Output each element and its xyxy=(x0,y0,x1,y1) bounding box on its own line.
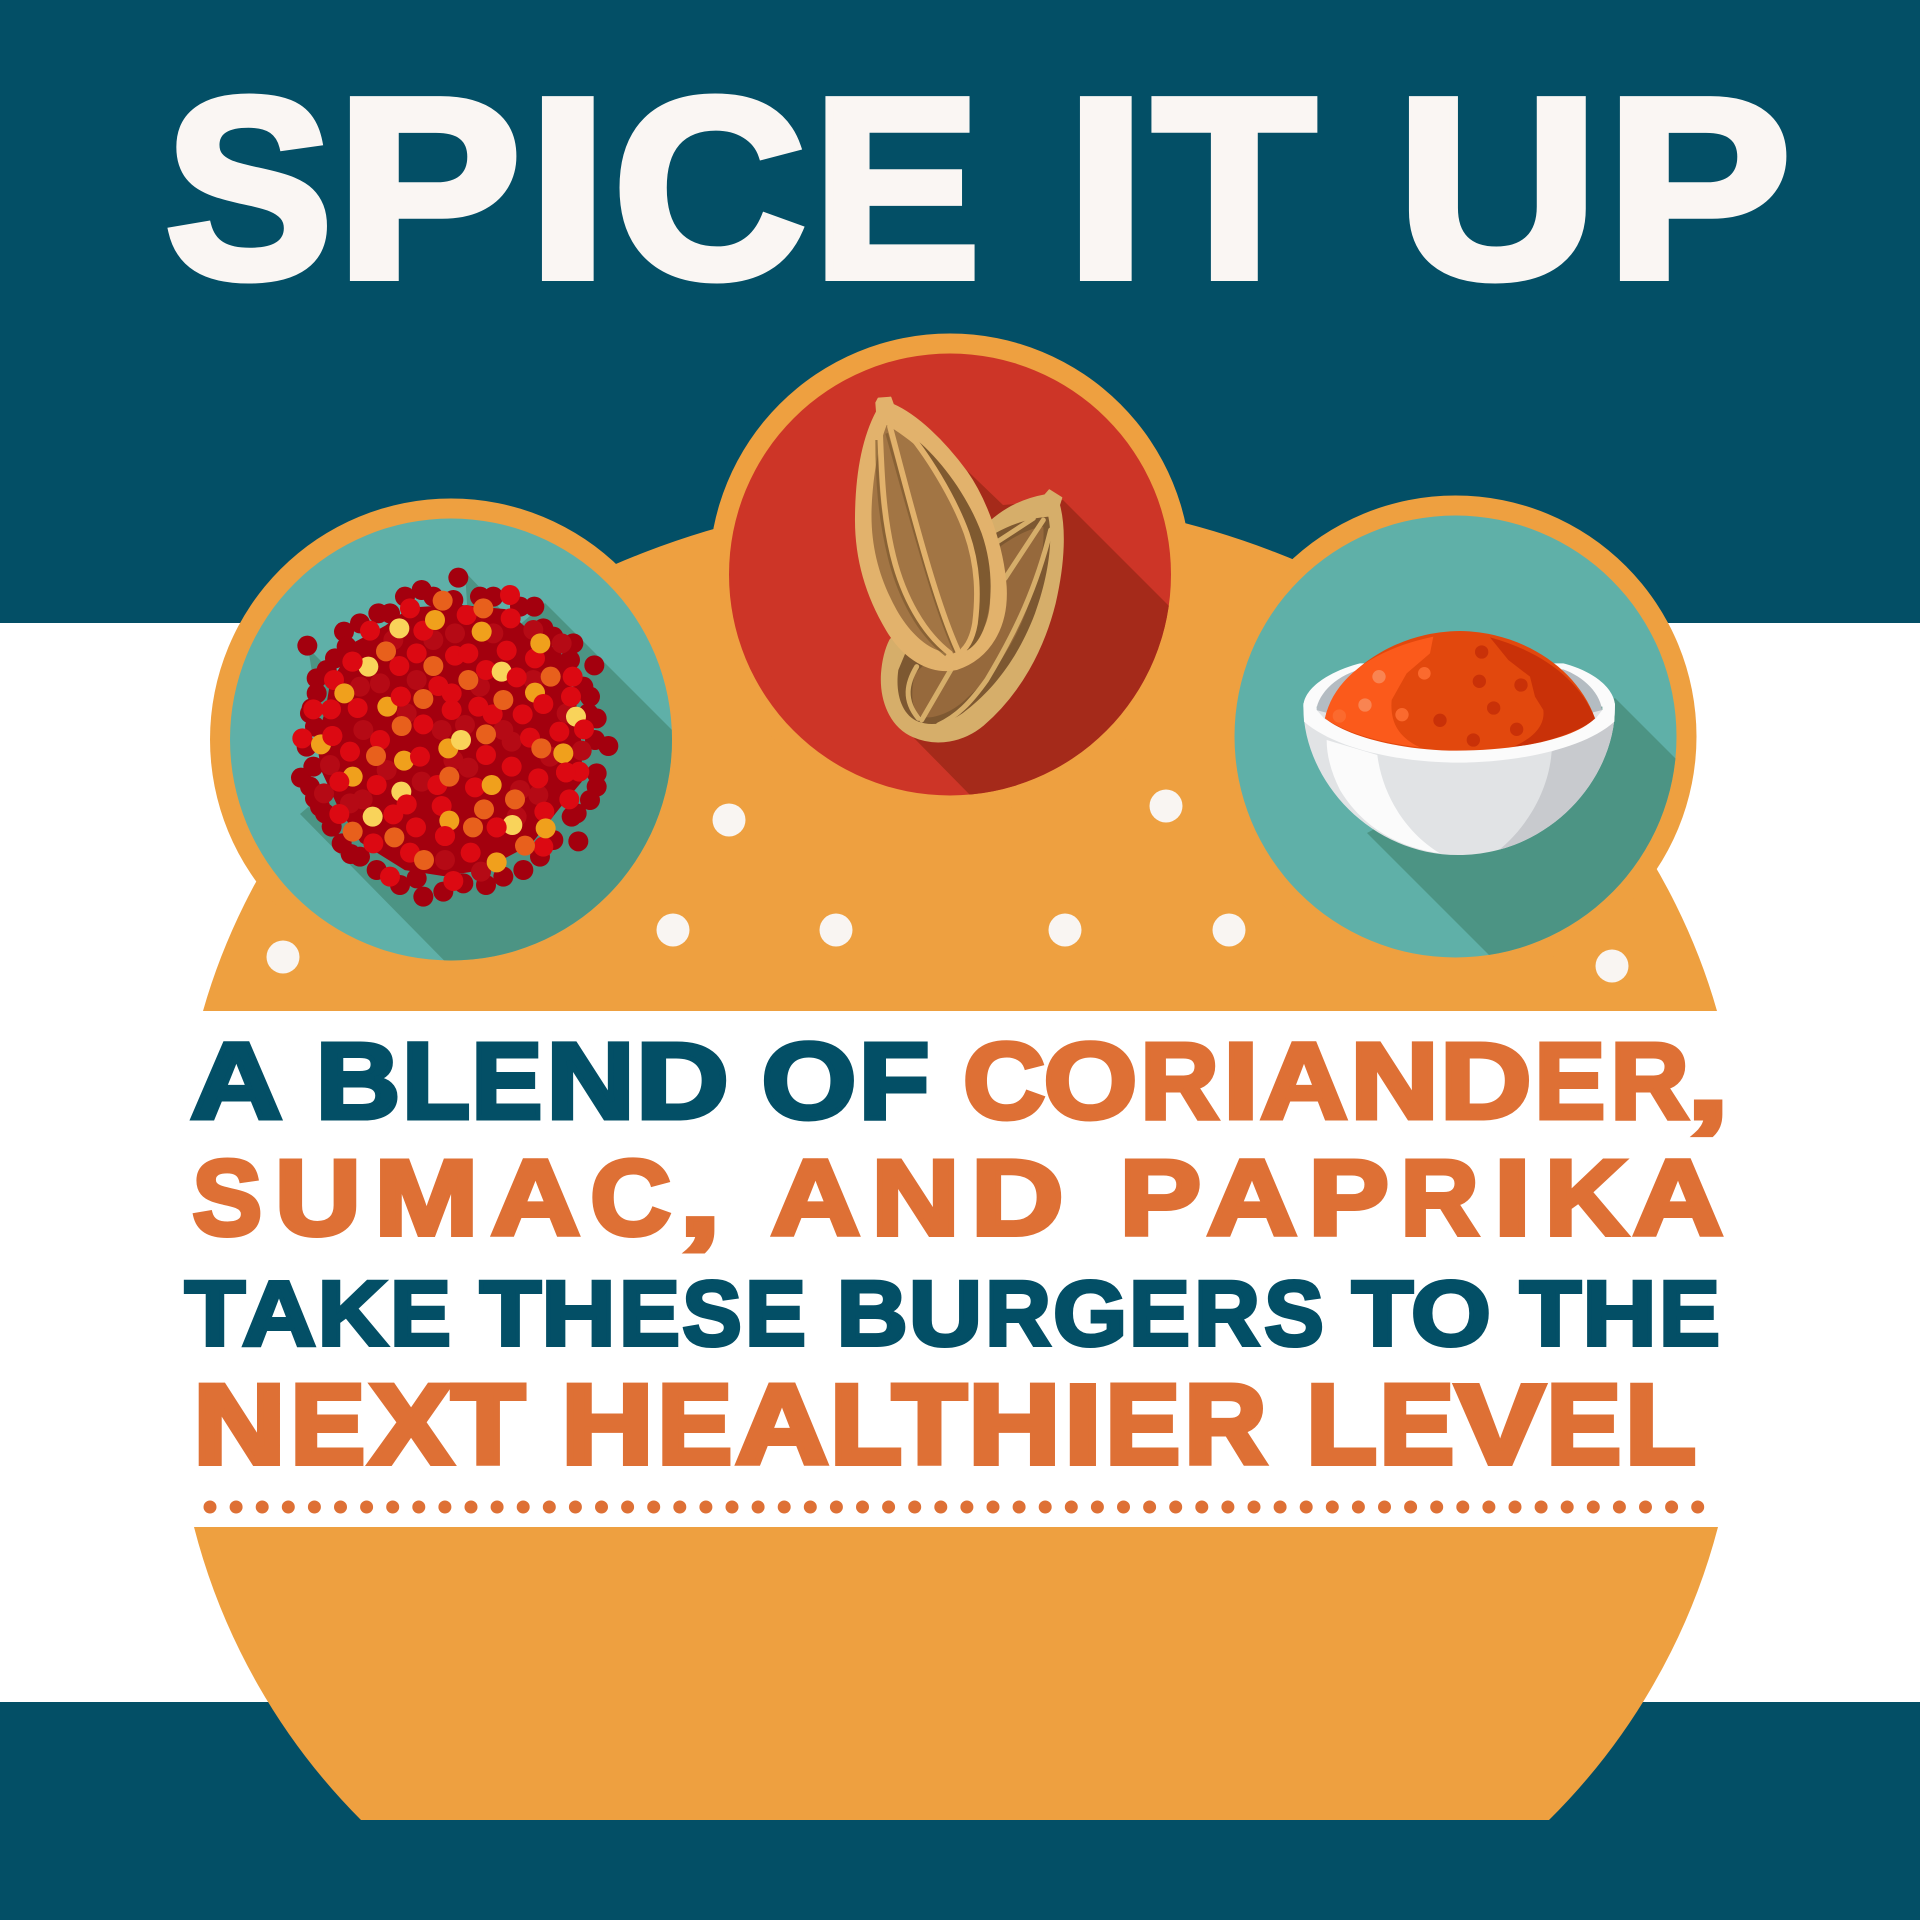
heading line 4: V xyxy=(1456,1362,1544,1487)
bowl right shade xyxy=(1499,722,1614,850)
orange mound xyxy=(203,494,1717,1011)
title: P xyxy=(1606,45,1792,332)
heading line 4: H xyxy=(969,1362,1060,1487)
heading line 1: A xyxy=(1260,1021,1348,1141)
heading line 2: U xyxy=(275,1138,361,1258)
heading line 4: L xyxy=(1307,1362,1377,1487)
long shadow: sumac xyxy=(300,575,672,960)
heading line 3: E xyxy=(1129,1263,1190,1365)
icon: paprika bowl xyxy=(1303,631,1617,857)
heading line 4: T xyxy=(892,1362,966,1487)
heading line 4: E xyxy=(291,1362,365,1487)
icon: coriander seeds xyxy=(856,397,1063,742)
heading line 2: P xyxy=(1120,1138,1201,1258)
heading line 1: O xyxy=(1044,1021,1137,1141)
back seed xyxy=(881,490,1063,742)
heading line 3: E xyxy=(745,1263,806,1365)
heading line 2: N xyxy=(872,1138,959,1258)
heading line 3: R xyxy=(1194,1263,1260,1365)
heading line 4: A xyxy=(736,1362,828,1487)
heading line 3: E xyxy=(619,1263,680,1365)
heading line 1 xyxy=(190,1021,1729,1141)
decorative white dots xyxy=(266,790,1628,982)
heading line 3: G xyxy=(1053,1263,1127,1365)
bowl inner back xyxy=(1316,669,1602,713)
heading line 1: A xyxy=(190,1021,279,1141)
heading line 3: R xyxy=(985,1263,1051,1365)
bowl back rim xyxy=(1303,663,1615,707)
panel: paprika circle xyxy=(1234,496,1696,958)
heading line 4: T xyxy=(452,1362,525,1487)
heading line 3: E xyxy=(1659,1263,1720,1365)
paprika mound xyxy=(1325,631,1595,751)
long shadow: paprika xyxy=(1367,698,1676,955)
heading line 2: A xyxy=(1633,1138,1723,1258)
heading line 4: E xyxy=(658,1362,732,1487)
heading line 4: X xyxy=(370,1362,452,1487)
mound specks xyxy=(1433,645,1528,747)
bowl body xyxy=(1303,707,1615,855)
orange bowl base xyxy=(194,1527,1718,1820)
heading line 4: I xyxy=(1064,1362,1101,1487)
heading line 2: A xyxy=(1207,1138,1297,1258)
heading line 1: F xyxy=(859,1021,929,1141)
panel: coriander circle xyxy=(713,334,1186,796)
heading line 1: R xyxy=(1611,1021,1689,1141)
heading line 2: S xyxy=(192,1138,262,1258)
title: I xyxy=(527,45,609,332)
heading line 4: N xyxy=(194,1362,285,1487)
heading line 1: C xyxy=(963,1021,1045,1141)
heading line 1: E xyxy=(1535,1021,1605,1141)
heading line 3: E xyxy=(390,1263,451,1365)
front seed xyxy=(856,397,1006,670)
title: E xyxy=(812,45,980,332)
title: C xyxy=(613,45,806,332)
heading line 4: E xyxy=(1380,1362,1454,1487)
heading line 1: D xyxy=(636,1021,729,1141)
heading line 3: T xyxy=(480,1263,541,1365)
bowl rim xyxy=(1303,703,1615,763)
heading line 1: , xyxy=(1687,1021,1729,1141)
heading line 4: L xyxy=(1626,1362,1696,1487)
heading line 2: K xyxy=(1545,1138,1627,1258)
heading line 2: D xyxy=(971,1138,1064,1258)
heading line 1: I xyxy=(1224,1021,1258,1141)
heading line 1: E xyxy=(472,1021,542,1141)
heading line 3: H xyxy=(1582,1263,1656,1365)
heading line 3: T xyxy=(185,1263,245,1365)
seed dark strip xyxy=(908,433,991,651)
heading line 3: T xyxy=(1520,1263,1581,1365)
heading line 1: R xyxy=(1141,1021,1219,1141)
title: T xyxy=(1153,45,1316,332)
title: I xyxy=(1065,45,1147,332)
heading line 4: L xyxy=(830,1362,902,1487)
mound shade xyxy=(1490,637,1595,747)
heading line 3: T xyxy=(1352,1263,1413,1365)
panel: sumac circle xyxy=(210,498,672,960)
heading line 4: H xyxy=(562,1362,653,1487)
heading line 4: E xyxy=(1106,1362,1180,1487)
title: P xyxy=(336,45,522,332)
heading line 2: A xyxy=(771,1138,860,1258)
heading line 3: S xyxy=(682,1263,742,1365)
heading line 1: O xyxy=(762,1021,856,1141)
heading line 3: S xyxy=(1264,1263,1324,1365)
heading line 1: B xyxy=(316,1021,400,1141)
heading line 3: B xyxy=(837,1263,908,1365)
mound highlight xyxy=(1325,637,1433,747)
heading line 3: A xyxy=(242,1263,316,1365)
heading line 3: O xyxy=(1411,1263,1491,1365)
heading line 2: , xyxy=(679,1138,721,1258)
heading line 3: U xyxy=(909,1263,982,1365)
heading line 1: L xyxy=(402,1021,470,1141)
heading line 3: K xyxy=(318,1263,387,1365)
heading line 1: N xyxy=(547,1021,634,1141)
heading line 2: C xyxy=(590,1138,671,1258)
heading line 1: N xyxy=(1351,1021,1438,1141)
heading line 2: R xyxy=(1401,1138,1479,1258)
icon: sumac pile xyxy=(291,568,618,907)
long shadow: coriander xyxy=(914,469,1169,794)
heading line 3: H xyxy=(542,1263,616,1365)
heading line 2: I xyxy=(1494,1138,1531,1258)
heading line 1: D xyxy=(1440,1021,1532,1141)
bowl left highlight xyxy=(1327,740,1440,853)
heading line 2: P xyxy=(1309,1138,1389,1258)
title: S xyxy=(165,45,333,332)
heading line 4: E xyxy=(1547,1362,1621,1487)
title: U xyxy=(1396,45,1598,332)
heading line 4: R xyxy=(1185,1362,1266,1487)
heading line 2: A xyxy=(491,1138,580,1258)
heading line 2: M xyxy=(375,1138,478,1258)
dotted divider xyxy=(210,1500,1698,1514)
